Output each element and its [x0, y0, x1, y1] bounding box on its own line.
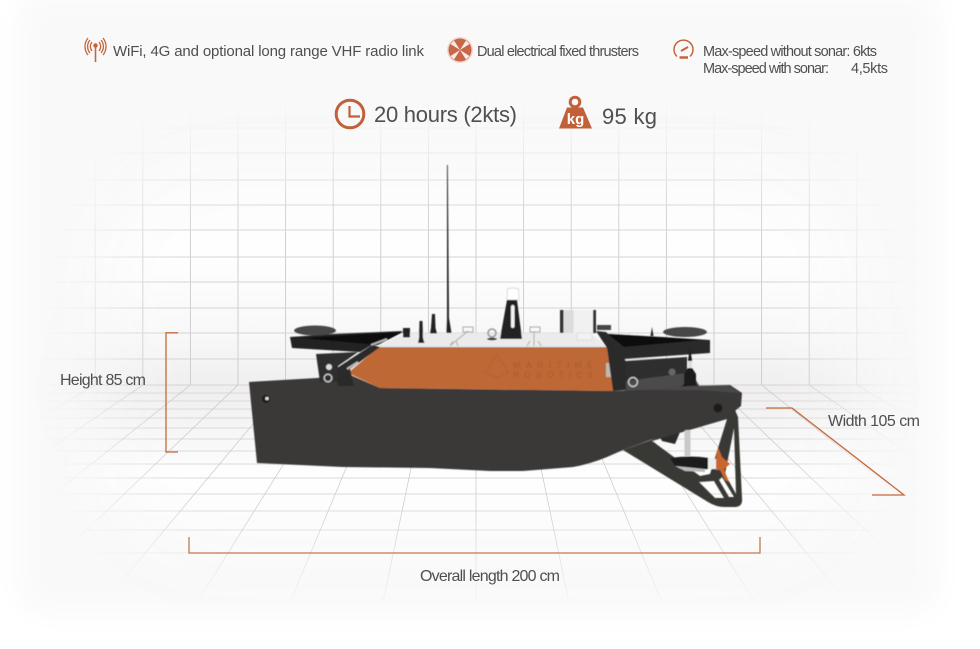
left puck [294, 326, 336, 336]
camera cylinder [560, 310, 611, 340]
text: max speed: Max-speed without sonar: 6kts [703, 44, 877, 60]
beacon mount [500, 288, 522, 339]
right strut [596, 331, 626, 391]
right deck strip [625, 370, 700, 392]
icon: thruster fan [447, 37, 473, 63]
hull bolt front [262, 395, 270, 403]
deck fittings [403, 314, 497, 343]
icon: kg weight [559, 97, 592, 128]
deck [374, 333, 610, 349]
text: height: Height 85 cm [60, 372, 146, 389]
hull highlight [640, 386, 740, 393]
left bracket bolt [326, 364, 332, 370]
text: weight: 95 kg [602, 104, 657, 129]
icon: clock [336, 100, 364, 128]
text: width: Width 105 cm [828, 413, 920, 430]
right bracket [625, 357, 687, 381]
dimension: height bracket [166, 333, 178, 452]
text: radio link: WiFi, 4G and optional long range VHF radio link [113, 43, 424, 60]
dimension: length bracket [189, 537, 760, 553]
icon: kg weight: kg [567, 111, 584, 128]
mast stand [680, 348, 700, 388]
text: thrusters: Dual electrical fixed thrusters [477, 44, 639, 60]
aft stub [650, 327, 654, 336]
dimension: width bracket [766, 408, 904, 495]
room shading [126, 374, 830, 406]
perspective grid [67, 129, 888, 598]
left upper plate [290, 331, 403, 352]
orange sonar body [348, 348, 613, 391]
right upper plate [607, 334, 710, 359]
text: max speed: 4,5kts [851, 61, 888, 77]
silver clips [450, 327, 541, 346]
right puck [663, 327, 707, 337]
text: max speed [703, 44, 888, 77]
aft frame [623, 410, 742, 507]
text: endurance: 20 hours (2kts) [374, 102, 517, 127]
text: length: Overall length 200 cm [420, 568, 560, 585]
hull bolt aft [714, 404, 722, 412]
pylon [684, 430, 690, 456]
icon: speedometer [674, 40, 693, 58]
antenna [446, 165, 452, 338]
body logo [485, 354, 593, 380]
body logo: MARITIME [513, 360, 593, 370]
left strut silver edge [347, 339, 387, 369]
boat [249, 165, 742, 507]
rear thruster [660, 432, 680, 444]
icon: wifi radio antenna [85, 38, 106, 62]
thruster [670, 447, 730, 482]
left bracket [316, 352, 358, 382]
left bracket ring [324, 374, 332, 382]
left strut [337, 345, 380, 386]
silver tag [606, 363, 611, 377]
hull [249, 374, 742, 471]
body logo: ROBOTICS [513, 370, 593, 380]
text: max speed: Max-speed with sonar: [703, 61, 829, 77]
